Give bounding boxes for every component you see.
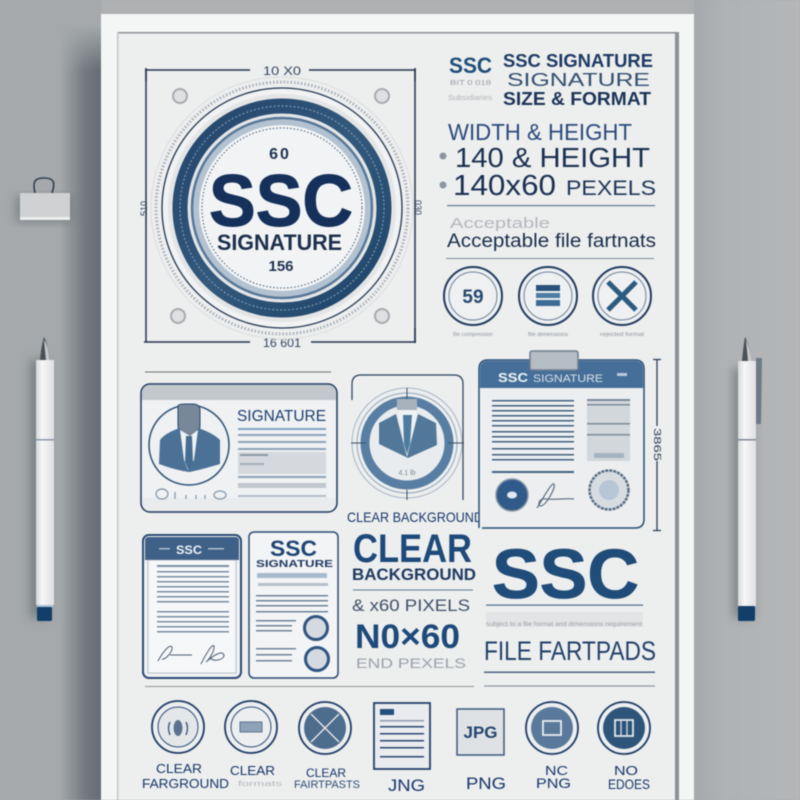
clipboard clip: [530, 351, 578, 370]
icon: cross: [299, 702, 351, 754]
signature seal diagram: SIGNATURE: [217, 230, 342, 255]
document lines: [492, 400, 574, 473]
icon captions: rejected format: [600, 332, 645, 338]
clear background caption: CLEAR BACKGROUND: [347, 509, 483, 525]
handwritten signature: [537, 484, 574, 508]
icon: rejected cross: [593, 267, 651, 325]
icon labels: CLEAR: [156, 761, 202, 776]
clear background heading: [352, 527, 476, 590]
panel: ssc signature sheet: SSC: [270, 536, 317, 561]
panel: headshot seal card: [351, 375, 464, 500]
width and height text: 140x60: [453, 170, 556, 202]
height dimension: [651, 360, 662, 530]
width and height text: 140 & HEIGHT: [455, 142, 650, 173]
dimension labels: 030: [413, 200, 423, 215]
handwritten signatures: [158, 646, 224, 664]
icon: no png: [526, 702, 578, 754]
text lines: [238, 428, 326, 497]
signature seal diagram: SSC: [209, 161, 353, 242]
large ssc wordmark: subject to a file format and dimensions requirement: [486, 622, 642, 628]
acceptable file formats text: Acceptable file fartnats: [447, 231, 656, 252]
title block: SIZE & FORMAT: [503, 89, 651, 109]
icon: size badge: [444, 267, 502, 325]
side table: [587, 399, 630, 461]
clear background heading: CLEAR: [353, 527, 472, 571]
panel: ssc signature document: [479, 351, 644, 528]
icon: file stack: [519, 267, 577, 325]
icon labels: JNG: [388, 776, 425, 795]
icon labels: PNG: [466, 774, 506, 793]
card footer marks: [156, 489, 226, 499]
height dimension: 3865: [651, 428, 662, 462]
icon: suit silhouette: [379, 399, 437, 458]
panel: ssc document: SSC: [176, 543, 202, 557]
icon: size badge: 59: [462, 287, 484, 308]
poster frame: [101, 14, 694, 800]
large ssc wordmark: SSC: [492, 535, 639, 613]
acceptable file formats text: [446, 215, 656, 259]
dimension labels: 16 601: [263, 338, 301, 350]
dimension labels: 10 X0: [263, 66, 301, 78]
panel: headshot seal card: 4.1 lb: [398, 470, 416, 477]
icon: document: [374, 703, 430, 769]
format icons: [444, 267, 651, 338]
icon: person avatar: [149, 404, 229, 485]
icon labels: NC: [545, 763, 568, 778]
dimension bracket: [144, 68, 416, 343]
panel: ssc signature document: SSC: [498, 371, 528, 385]
icon labels: PNG: [536, 775, 571, 791]
title block: [448, 51, 653, 109]
icon labels: [142, 761, 650, 795]
pixels dimensions text: [352, 596, 470, 671]
width and height text: [440, 119, 656, 206]
panel: ssc signature sheet: SIGNATURE: [256, 558, 333, 570]
icon labels: formats: [238, 781, 283, 788]
icon: silver seal: [590, 470, 628, 510]
icon: seals: [304, 616, 328, 670]
icon captions: file dimensions: [528, 332, 569, 338]
rings: [151, 77, 413, 339]
panel: signature id card: [141, 384, 337, 512]
bottom icons row: [142, 701, 650, 795]
icon captions: [453, 332, 645, 338]
icon: no edges: [598, 702, 650, 754]
icon labels: CLEAR: [306, 766, 346, 780]
acceptable file formats text: Acceptable: [450, 215, 550, 232]
icon: jpg file: JPG: [463, 723, 498, 742]
pixels dimensions text: N0×60: [355, 618, 460, 656]
icon labels: NO: [614, 763, 638, 778]
icon labels: FAIRTPASTS: [294, 779, 360, 791]
title block: SSC SIGNATURE: [503, 51, 653, 71]
binder clip: [16, 178, 70, 222]
signature seal diagram: 156: [268, 258, 294, 275]
panel: ssc signature document: SIGNATURE: [533, 373, 603, 385]
corner screws: [171, 89, 389, 323]
pixels dimensions text: END PEXELS: [356, 655, 466, 671]
panel: signature id card: SIGNATURE: [237, 408, 326, 425]
right pen: [733, 337, 762, 621]
text lines: [256, 595, 328, 662]
panel: ssc document: [143, 535, 241, 678]
pixels dimensions text: & x60 PIXELS: [352, 596, 470, 615]
width and height text: PEXELS: [566, 177, 656, 200]
text lines: [157, 565, 229, 632]
icon: clear card: [225, 701, 277, 753]
dimension labels: 510: [139, 201, 149, 216]
icon labels: EDOES: [608, 776, 650, 792]
clear background heading: BACKGROUND: [352, 566, 476, 584]
icon: clear foreground: [152, 701, 204, 753]
title block: BIT 0 018: [450, 80, 491, 87]
panel: ssc signature sheet: [249, 532, 338, 678]
icon labels: FARGROUND: [142, 776, 229, 791]
dimension labels: [139, 66, 423, 350]
icon captions: file compression: [453, 332, 493, 338]
seal text: 60: [269, 146, 291, 163]
title block: Subsidiaries: [448, 95, 493, 102]
file formats text: FILE FARTPADS: [484, 636, 656, 666]
title block: SSC: [449, 53, 492, 78]
icon labels: CLEAR: [230, 763, 275, 778]
title block: SIGNATURE: [507, 70, 650, 90]
signature seal diagram: [139, 66, 423, 350]
icon: round stamp: [496, 479, 528, 511]
left pen: [30, 337, 54, 621]
width and height text: WIDTH & HEIGHT: [448, 119, 632, 145]
icon: jpg file: [457, 709, 504, 755]
